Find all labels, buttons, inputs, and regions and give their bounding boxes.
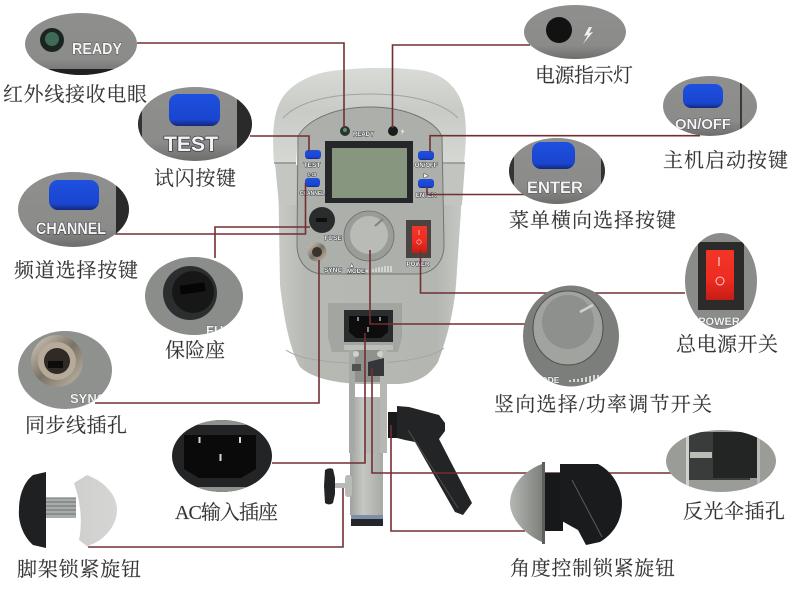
flash head body xyxy=(273,68,466,384)
callout: CHANNEL button xyxy=(14,172,138,282)
READY lens photo xyxy=(25,13,137,75)
mode dial: MODE xyxy=(347,269,365,275)
knob photo xyxy=(19,472,117,548)
dial photo: ODE xyxy=(541,375,560,385)
panel buttons: TEST xyxy=(304,162,320,169)
sync socket xyxy=(308,242,342,274)
ON/OFF button photo: ON/OFF xyxy=(675,116,731,133)
label: power indicator: 电源指示灯 xyxy=(535,64,633,87)
panel buttons: CHANNEL xyxy=(300,191,324,197)
callout: READY infrared eye xyxy=(3,13,147,106)
label: test flash: 试闪按键 xyxy=(154,167,236,190)
fuse holder photo: FU xyxy=(206,323,223,338)
ready indicator xyxy=(340,126,374,138)
panel buttons xyxy=(300,150,438,199)
sync socket: SYNC xyxy=(324,267,342,274)
callout: mode dial xyxy=(494,285,712,416)
power rocker switch xyxy=(406,220,431,268)
flash indicator xyxy=(388,126,404,136)
callout: umbrella socket xyxy=(666,430,785,523)
label: umbrella hole: 反光伞插孔 xyxy=(683,500,785,523)
callout: FUSE holder xyxy=(145,257,243,362)
angle knob photo xyxy=(510,462,622,545)
label: vertical select and power dial: 竖向选择/功率调节开关 xyxy=(494,393,712,416)
mode dial: ▲ xyxy=(349,263,354,269)
fuse holder xyxy=(309,207,342,242)
callout: angle lock knob xyxy=(510,462,675,580)
small tripod lock knob xyxy=(324,468,345,504)
label: main power switch: 总电源开关 xyxy=(676,333,778,356)
callout: ENTER button xyxy=(509,138,676,232)
leader lines xyxy=(88,43,700,547)
ENTER button photo: ENTER xyxy=(527,178,583,197)
label: main switch button: 主机启动按键 xyxy=(663,149,788,172)
panel buttons: 1-18 xyxy=(307,172,317,177)
panel buttons: ON/OFF xyxy=(415,163,438,169)
callout: tripod lock knob xyxy=(17,472,141,581)
angle locking handle xyxy=(388,406,472,515)
callout: AC input xyxy=(172,420,278,524)
callout: SYNC socket xyxy=(18,331,127,437)
power rocker switch: POWER xyxy=(407,262,430,268)
callout: main power switch xyxy=(676,233,778,356)
umbrella socket photo xyxy=(666,430,776,492)
label: channel select: 频道选择按键 xyxy=(14,259,138,282)
sync socket photo: SYNC xyxy=(70,391,107,406)
control panel xyxy=(300,126,438,342)
TEST button photo: TEST xyxy=(164,133,218,156)
CHANNEL button photo: CHANNEL xyxy=(36,219,106,238)
flash LED photo xyxy=(524,5,626,59)
dial photo xyxy=(523,285,619,387)
panel buttons: ▶ xyxy=(423,173,429,179)
ENTER button photo xyxy=(509,138,605,204)
stand: yoke, joint and base xyxy=(345,397,383,526)
label: angle lock knob: 角度控制锁紧旋钮 xyxy=(510,557,675,580)
ready indicator: READY xyxy=(353,132,374,138)
rocker switch photo: POWER xyxy=(698,316,740,328)
callout: TEST button xyxy=(138,87,252,190)
fuse holder: FUSE xyxy=(324,235,342,242)
bracket below the head xyxy=(344,345,393,453)
AC socket photo xyxy=(172,420,272,492)
label: AC input socket: AC输入插座 xyxy=(175,501,278,524)
panel buttons: ENTER xyxy=(416,193,437,199)
label: fuse seat: 保险座 xyxy=(165,339,225,362)
callout: power indicator xyxy=(524,5,633,87)
label: menu horizontal select: 菜单横向选择按键 xyxy=(509,209,676,232)
mode dial xyxy=(344,211,394,275)
LCD screen xyxy=(325,141,413,203)
label: infrared eye: 红外线接收电眼 xyxy=(3,83,147,106)
READY lens photo: READY xyxy=(72,41,122,58)
AC socket xyxy=(344,310,393,342)
label: sync jack: 同步线插孔 xyxy=(25,414,127,437)
label: tripod lock: 脚架锁紧旋钮 xyxy=(17,558,141,581)
callout: ON/OFF button xyxy=(663,76,788,172)
